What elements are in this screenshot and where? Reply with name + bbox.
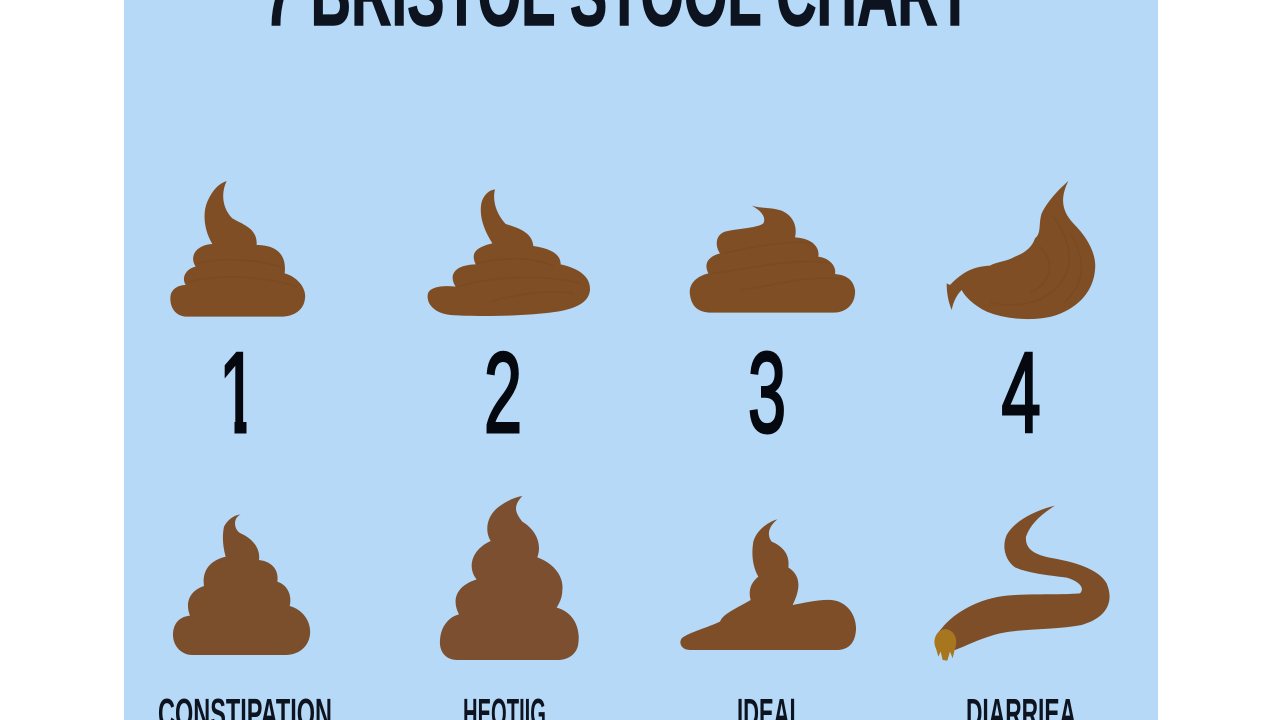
number 4: 4 [1001, 330, 1041, 457]
icon: stool shape 3 [690, 206, 855, 313]
icon: stool shape 5 [173, 514, 310, 655]
number 2: 2 [484, 329, 522, 456]
icon: stool shape 7 [680, 519, 856, 650]
number 3: 3 [748, 329, 786, 456]
icon: stool shape 6 [440, 496, 579, 660]
icon: stool shape 2 [428, 189, 590, 316]
icon: stool shape 1 [170, 181, 305, 317]
number 1: 1 [219, 329, 257, 456]
icon: stool shape 8 [934, 506, 1110, 661]
icon: stool shape 4 [947, 181, 1095, 319]
